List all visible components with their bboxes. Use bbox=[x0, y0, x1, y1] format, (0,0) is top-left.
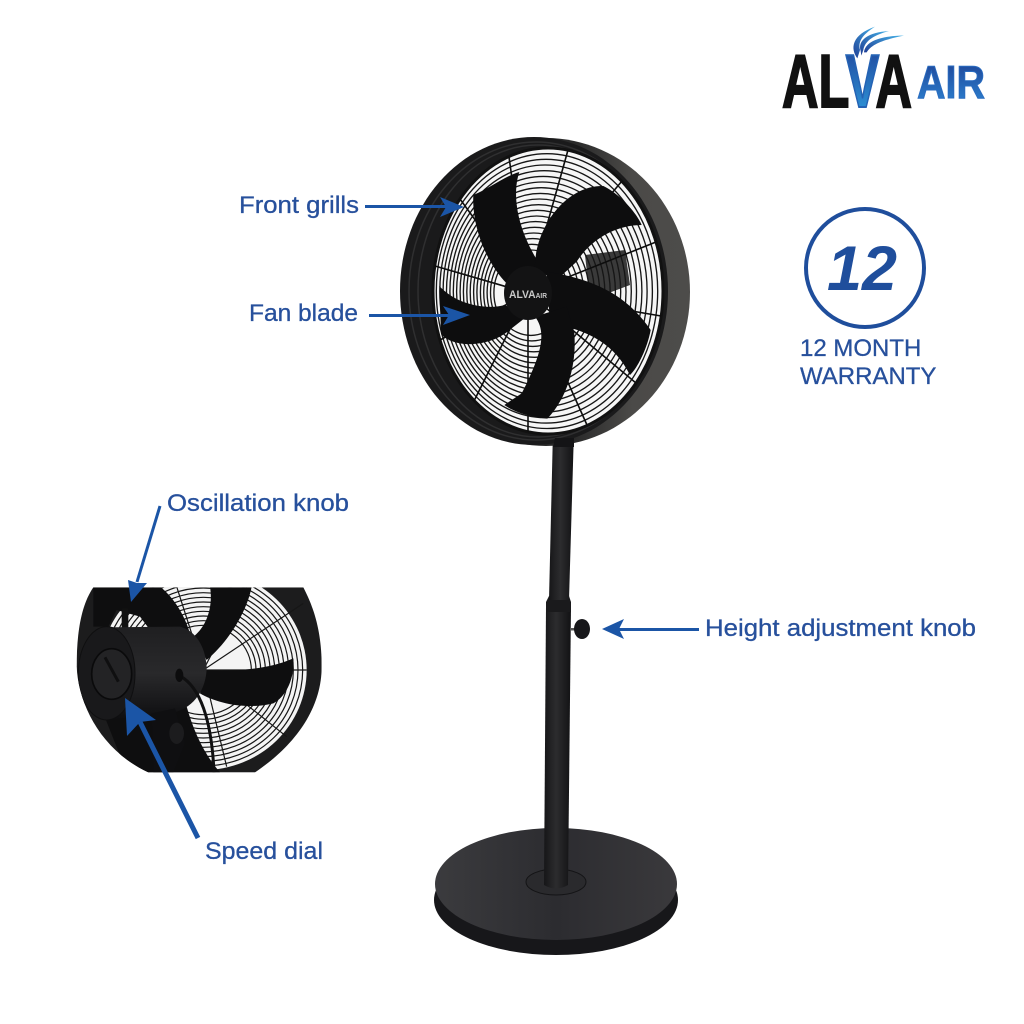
power cord bbox=[180, 676, 214, 772]
inset: rear of fan head bbox=[76, 587, 322, 772]
motor body bbox=[112, 626, 207, 711]
fan head bbox=[400, 137, 690, 447]
arrow bbox=[365, 197, 464, 217]
inset ring bbox=[76, 587, 322, 772]
inset opening bbox=[110, 588, 307, 770]
speed dial bbox=[92, 649, 132, 699]
logo AIR: AIR bbox=[917, 56, 985, 108]
callout: fan blade bbox=[249, 300, 470, 327]
grill opening bbox=[433, 148, 663, 434]
label: Front grills bbox=[239, 192, 359, 219]
oscillation knob bbox=[122, 611, 128, 628]
base rim bbox=[434, 845, 678, 955]
label: Speed dial bbox=[205, 838, 323, 865]
front grill wires bbox=[436, 154, 658, 428]
warranty caption: 12 MONTH bbox=[800, 335, 921, 362]
base top bbox=[435, 828, 677, 940]
warranty caption: WARRANTY bbox=[800, 363, 936, 390]
hub bbox=[504, 266, 552, 320]
logo wordmark: ALVA bbox=[782, 39, 912, 123]
label: Oscillation knob bbox=[167, 490, 349, 517]
fan stand bbox=[434, 430, 678, 955]
logo: Alva Air bbox=[782, 27, 985, 123]
front ring bbox=[400, 137, 668, 445]
label: Height adjustment knob bbox=[705, 615, 976, 642]
warranty circle bbox=[806, 209, 924, 327]
pivot bracket bbox=[153, 772, 174, 773]
callout: oscillation knob bbox=[128, 490, 349, 602]
inset grill wires bbox=[114, 587, 307, 767]
callout: height adjustment knob bbox=[602, 615, 976, 642]
logo wings bbox=[853, 27, 904, 58]
hub logo: ALVAAIR bbox=[509, 289, 547, 301]
warranty badge bbox=[800, 209, 936, 390]
dial pointer bbox=[105, 657, 118, 682]
pole collar bbox=[546, 596, 571, 612]
cord grommet bbox=[175, 669, 183, 682]
arrow bbox=[125, 698, 198, 838]
rear shell bbox=[402, 138, 690, 446]
base flange bbox=[526, 869, 586, 895]
bracket knob bbox=[169, 723, 184, 744]
height knob bbox=[574, 619, 590, 639]
lower pole bbox=[544, 606, 571, 888]
fan blades bbox=[439, 172, 651, 419]
label: Fan blade bbox=[249, 300, 358, 327]
rear motor glimpse bbox=[585, 250, 630, 300]
warranty number: 12 bbox=[827, 234, 897, 304]
inset blades bbox=[93, 587, 294, 772]
arrow bbox=[369, 306, 470, 325]
motor face bbox=[78, 627, 135, 720]
callout: speed dial bbox=[125, 698, 323, 865]
arrow bbox=[602, 619, 699, 639]
pole in front of grill bbox=[553, 438, 574, 447]
arrow bbox=[128, 506, 160, 602]
height knob stem bbox=[570, 628, 578, 630]
upper pole bbox=[549, 430, 574, 600]
callout: front grills bbox=[239, 192, 464, 219]
